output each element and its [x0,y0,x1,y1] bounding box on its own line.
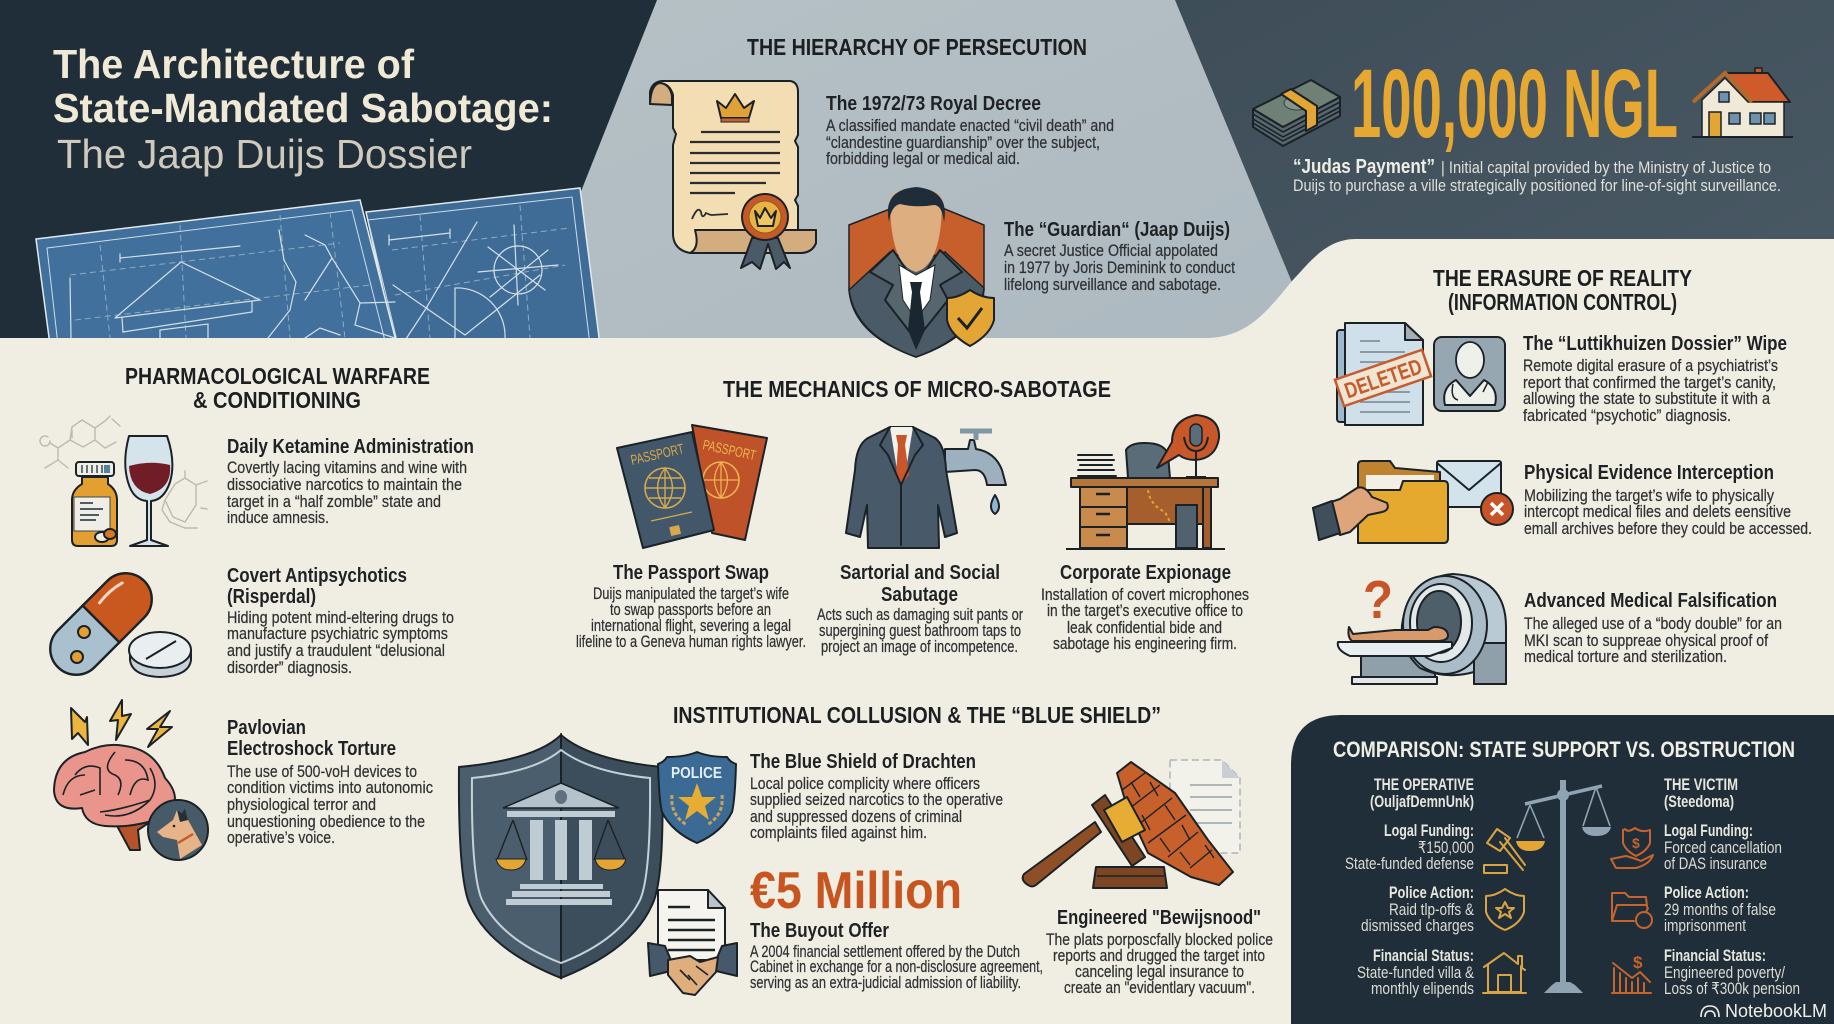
text: the buyout offer [750,920,1043,992]
text: luttikhuizen dossier wipe: report that confirmed the target’s canity, [1523,374,1776,392]
column: the victim: Loss of ₹300k pension [1664,980,1800,998]
text: daily ketamine administration: Covertly lacing vitamins and wine with [227,459,467,477]
text: physical evidence interception [1524,462,1812,538]
column: the operative [1345,776,1474,998]
text: royal decree: The 1972/73 Royal Decree [826,93,1041,115]
text: the blue shield of drachten [750,751,1003,842]
text: the buyout offer: Cabinet in exchange for a non-disclosure agreement, [750,958,1043,976]
heading: pharmacological warfare: & CONDITIONING [193,387,361,413]
text: corporate expionage: Installation of covert microphones [1041,586,1249,604]
column: the victim [1664,776,1800,998]
icon: house [1692,68,1793,137]
icon: balance scale [1516,780,1611,993]
icon: royal decree scroll [650,81,816,269]
panel: the mechanics of micro-sabotage [576,376,1249,656]
icon: MRI scanner with question mark [1338,570,1506,684]
text: engineered bewijsnood: Engineered "Bewijsnood" [1057,907,1261,929]
text: physical evidence interception: Mobilizing the target’s wife to physically [1524,487,1775,505]
text: royal decree: forbidding legal or medical aid. [826,150,1020,168]
text: covert antipsychotics: manufacture psychiatric symptoms [227,625,448,643]
panel: dark header background [0,0,1834,345]
text: pavlovian electroshock torture: The use of 500-voH devices to [227,763,417,781]
text: luttikhuizen dossier wipe [1523,333,1787,425]
column: the victim: 29 months of false [1664,901,1776,919]
text: corporate expionage: sabotage his engineering firm. [1053,635,1237,653]
text: the buyout offer: The Buyout Offer [750,920,889,942]
icon: damaged suit and dripping tap [846,427,1006,548]
heading: erasure: THE ERASURE OF REALITY [1433,265,1692,291]
heading: hierarchy: THE HIERARCHY OF PERSECUTION [747,34,1087,60]
heading: erasure: (INFORMATION CONTROL) [1448,289,1677,315]
column: the operative: Financial Status: [1373,947,1474,965]
column: the operative: State-funded defense [1345,855,1474,873]
text: the blue shield of drachten: and suppressed dozens of criminal [750,808,962,826]
title [53,41,553,177]
icon: police shield [1486,889,1524,930]
text: advanced medical falsification: The alleged use of a “body double” for an [1524,615,1782,633]
icon: guardian figure on shield [849,187,994,357]
text: daily ketamine administration: induce amnesis. [227,509,329,527]
icon: stack of money [1253,80,1340,146]
text: covert antipsychotics [227,565,454,677]
text: the guardian [1004,219,1235,294]
panel: hierarchy trapezoid [520,0,1310,345]
text: sartorial and social sabutage [817,562,1023,656]
text: advanced medical falsification: MKI scan to suppreae ohysical proof of [1524,632,1768,650]
panel: institutional collusion and the blue shield [459,702,1273,997]
column: the victim: Financial Status: [1664,947,1766,965]
text: luttikhuizen dossier wipe: The “Luttikhuizen Dossier” Wipe [1523,333,1787,355]
text: daily ketamine administration: dissociative narcotics to maintain the [227,476,462,494]
panel: judas payment [1253,49,1793,195]
text: daily ketamine administration: target in a “half zomble” state and [227,493,441,511]
icon: falling chart: $ [1633,953,1643,972]
text: the passport swap: international flight, severing a legal [591,617,791,635]
icon: folder with badge [1612,893,1652,928]
heading: institutional collusion: INSTITUTIONAL COLLUSION & THE “BLUE SHIELD” [673,702,1161,728]
big number: 5 million euro: €5 Million [750,862,962,920]
text: the buyout offer: A 2004 financial settlement offered by the Dutch [750,943,1020,961]
text: sartorial and social sabutage: project an image of incompetence. [821,638,1018,656]
text: engineered bewijsnood: create an "evidentlary vacuum". [1064,979,1255,997]
column: the operative: THE OPERATIVE [1374,776,1474,794]
text: corporate expionage: in the target’s executive office to [1047,602,1243,620]
icon: passports [617,425,767,548]
heading: pharmacological warfare [125,363,430,413]
text: royal decree: “clandestine guardianship” over the subject, [826,134,1100,152]
text: sartorial and social sabutage: Sartorial and Social [840,562,1000,584]
text: pavlovian electroshock torture [227,717,433,847]
text: covert antipsychotics: disorder” diagnosis. [227,659,352,677]
column: the operative: Raid tlp-offs & [1389,901,1474,919]
text: covert antipsychotics: Hiding potent mind-eltering drugs to [227,609,454,627]
text: pavlovian electroshock torture: operative’s voice. [227,829,335,847]
text: daily ketamine administration [227,436,474,527]
icon: hand with money shield [1611,828,1653,868]
icon: folder and intercepted email [1313,461,1513,543]
heading: erasure [1433,265,1692,315]
text: the passport swap: The Passport Swap [613,562,769,584]
column: the victim: of DAS insurance [1664,855,1767,873]
column: the operative: Police Action: [1389,884,1474,902]
text: daily ketamine administration: Daily Ketamine Administration [227,436,474,458]
text: sartorial and social sabutage: Sabutage [881,584,958,606]
icon: pill bottle, wine and molecules [40,416,207,546]
icon: falling chart [1612,953,1651,993]
text: the buyout offer: serving as an extra-judicial admission of liability. [750,974,1021,992]
text: the blue shield of drachten: complaints filed against him. [750,824,927,842]
column: the victim: Logal Funding: [1664,822,1753,840]
text: royal decree [826,93,1114,168]
text: engineered bewijsnood [1046,907,1273,997]
icon: gavel, brick wall and document [1023,760,1240,888]
column: the operative: ₹150,000 [1418,839,1474,857]
icon: police badge [658,752,736,843]
text: the passport swap [576,562,806,651]
title: State-Mandated Sabotage: [53,85,553,131]
icon: document and handshake [648,890,737,995]
icon: passports: PASSPORT [701,436,758,463]
panel: the hierarchy of persecution [650,34,1235,357]
text: covert antipsychotics: Covert Antipsychotics [227,565,407,587]
text: pavlovian electroshock torture: Electroshock Torture [227,738,396,760]
text: the blue shield of drachten: Local police complicity where officers [750,775,980,793]
column: the operative: State-funded villa & [1357,964,1474,982]
text: the guardian: The “Guardian“ (Jaap Duijs) [1004,219,1230,241]
column: the victim: Engineered poverty/ [1664,964,1785,982]
panel: cream body background [0,239,1834,1024]
text: corporate expionage: Corporate Expionage [1060,562,1231,584]
text: physical evidence interception: intercopt medical files and delets eensitive [1524,503,1791,521]
text: the passport swap: to swap passports before an [610,601,771,619]
column: the operative: (OuljafDemnUnk) [1370,793,1474,811]
illustration: blueprints [36,188,600,345]
panel: comparison state support vs obstruction [1291,715,1834,1024]
panel: right header background [1170,0,1834,345]
text: advanced medical falsification [1524,590,1782,666]
heading: pharmacological warfare: PHARMACOLOGICAL WARFARE [125,363,430,389]
column: the victim: Forced cancellation [1664,839,1782,857]
icon: MRI scanner with question mark: ? [1363,570,1393,630]
text: the passport swap: Duijs manipulated the target’s wife [593,585,789,603]
icon: deleted dossier [1335,323,1431,425]
column: the operative: Logal Funding: [1384,822,1474,840]
text: luttikhuizen dossier wipe: allowing the state to substitute it with a [1523,390,1771,408]
text: royal decree: A classified mandate enacted “civil death” and [826,117,1114,135]
text: corporate expionage: leak confidential bide and [1067,619,1222,637]
column: the operative: dismissed charges [1361,917,1474,935]
text: advanced medical falsification: Advanced Medical Falsification [1524,590,1777,612]
icon: capsule and tablet [39,562,191,686]
text: the passport swap: lifeline to a Geneva human rights lawyer. [576,633,806,651]
panel: erasure of reality [1313,265,1812,684]
icon: office desk with hidden microphone [1066,415,1225,549]
title: The Jaap Duijs Dossier [57,131,472,177]
text: advanced medical falsification: medical torture and sterilization. [1524,648,1727,666]
icon: justice shield with courthouse [459,735,663,978]
text: the blue shield of drachten: supplied seized narcotics to the operative [750,791,1003,809]
icon: gavel [1484,829,1525,873]
heading: mechanics: THE MECHANICS OF MICRO-SABOTAGE [723,376,1111,402]
text: the blue shield of drachten: The Blue Shield of Drachten [750,751,976,773]
text: the guardian: A secret Justice Official appolated [1004,242,1218,260]
text: luttikhuizen dossier wipe: fabricated “psychotic” diagnosis. [1523,407,1731,425]
logo: NotebookLM: NotebookLM [1725,1001,1827,1021]
text: covert antipsychotics: (Risperdal) [227,586,316,608]
text: engineered bewijsnood: The plats porposcfally blocked police [1046,931,1273,949]
text: the guardian: lifelong surveillance and sabotage. [1004,276,1221,294]
text: sartorial and social sabutage: Acts such as damaging suit pants or [817,606,1023,624]
text: the guardian: in 1977 by Joris Deminink to conduct [1004,259,1235,277]
icon: villa house [1483,953,1526,993]
text: covert antipsychotics: and justify a traudulent “delusional [227,642,445,660]
icon: passports: PASSPORT [629,440,686,468]
text: luttikhuizen dossier wipe: Remote digital erasure of a psychiatrist’s [1523,357,1778,375]
text: judas payment description: “Judas Payment” [1293,156,1435,178]
text: pavlovian electroshock torture: Pavlovian [227,717,306,739]
text: judas payment description: | Initial capital provided by the Ministry of Justice to [1441,158,1771,177]
text: corporate expionage [1041,562,1249,653]
column: the victim: THE VICTIM [1664,776,1738,794]
column: the victim: Police Action: [1664,884,1749,902]
icon: psychiatrist [1434,337,1505,411]
text: sartorial and social sabutage: supergining guest bathroom taps to [819,622,1021,640]
column: the victim: (Steedoma) [1664,793,1734,811]
title: The Architecture of [53,41,414,87]
text: pavlovian electroshock torture: physiological terror and [227,796,376,814]
text: engineered bewijsnood: reports and drugged the target into [1053,947,1265,965]
column: the operative: monthly elipends [1371,980,1474,998]
text: judas payment description [1293,156,1781,195]
icon: hand with money shield: $ [1632,835,1640,851]
text: pavlovian electroshock torture: condition victims into autonomic [227,779,433,797]
icon: brain with lightning and dog [54,700,208,860]
text: pavlovian electroshock torture: unquestioning obedience to the [227,813,425,831]
icon: deleted dossier: DELETED [1341,354,1425,403]
text: engineered bewijsnood: canceling legal insurance to [1075,963,1244,981]
text: physical evidence interception: Physical Evidence Interception [1524,462,1774,484]
panel: pharmacological warfare and conditioning [39,363,474,860]
icon: police badge: POLICE [671,765,722,782]
column: the victim: imprisonment [1664,917,1746,935]
